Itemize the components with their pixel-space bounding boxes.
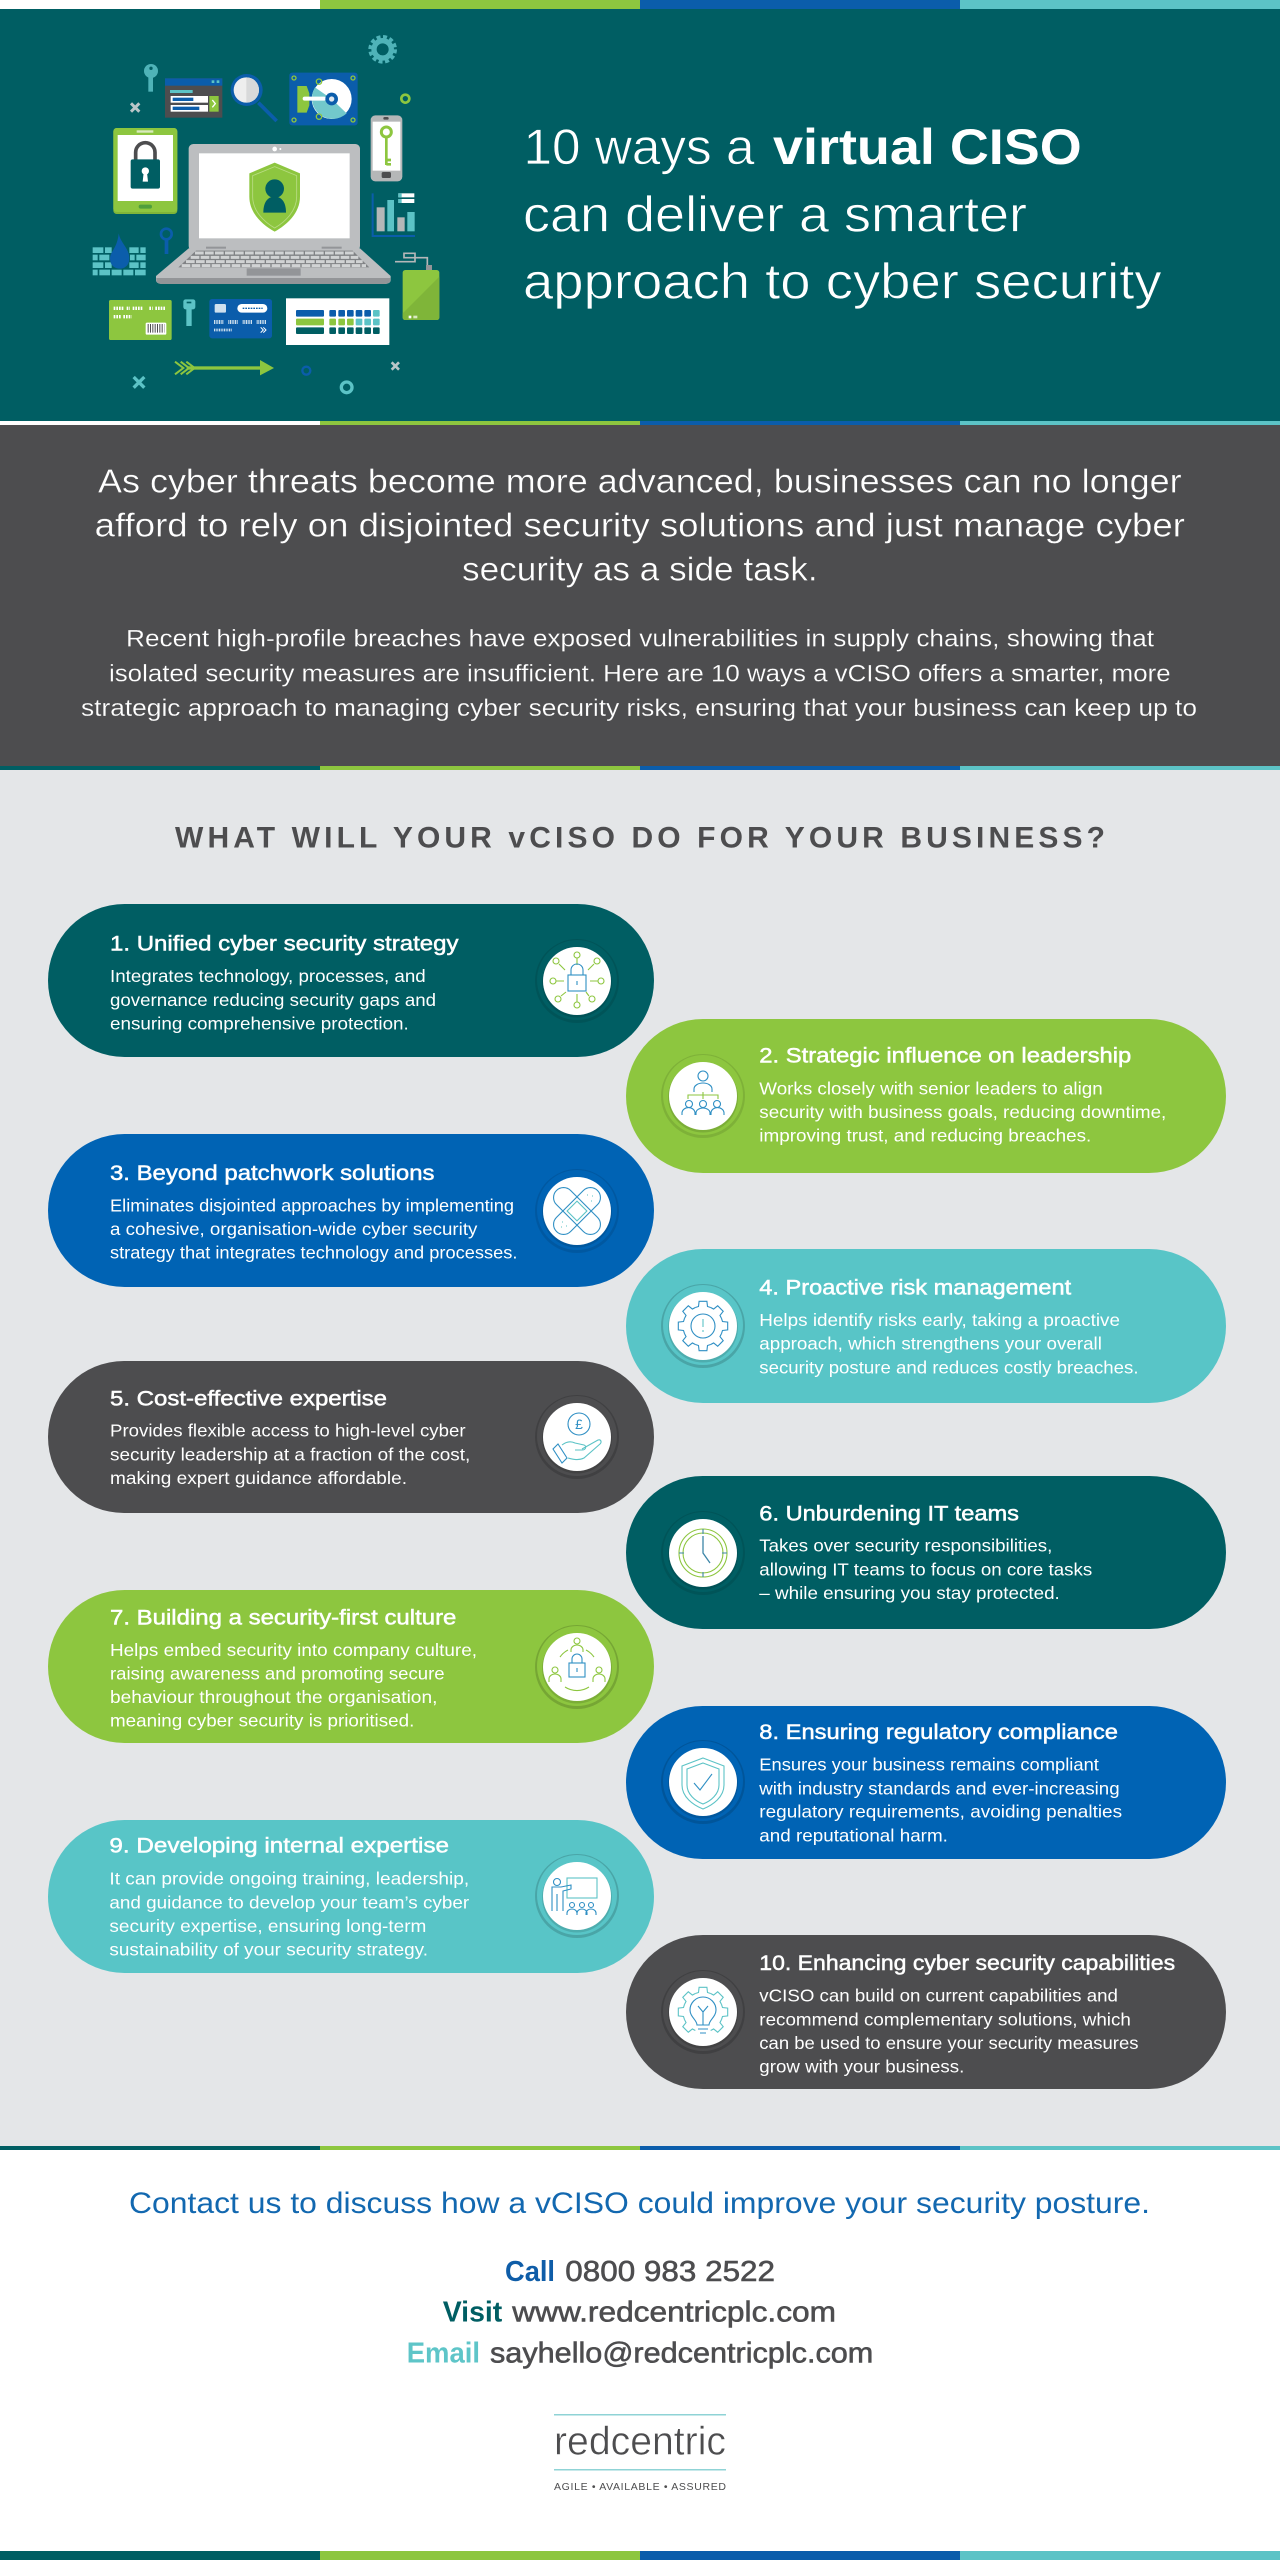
card title: 7. Building a security-first culture [110, 1605, 456, 1629]
card text: making expert guidance affordable. [110, 1468, 407, 1488]
pill [48, 1820, 654, 1973]
top colour strip [0, 0, 1280, 9]
contact: website: www.redcentricplc.com [511, 2297, 836, 2329]
logo: redcentric [554, 2414, 726, 2493]
icon: blue key [161, 229, 172, 254]
icon: leadership org chart [661, 1054, 745, 1138]
intro statement [95, 463, 1185, 588]
card text: and guidance to develop your team’s cyber [109, 1892, 469, 1912]
pill [48, 1590, 654, 1743]
card title: 1. Unified cyber security strategy [110, 932, 459, 956]
card text: recommend complementary solutions, which [759, 2009, 1131, 2029]
icon: lightbulb in gear [661, 1970, 745, 2054]
arrow [175, 360, 274, 375]
pill [626, 1706, 1226, 1859]
panel: grey benefits background [0, 770, 1280, 2146]
icon: external drive [395, 253, 439, 320]
icon: crossed plasters [535, 1169, 619, 1253]
icon: bank card [209, 299, 272, 338]
card 5 [48, 1361, 654, 1513]
bottom colour strip [0, 2551, 1280, 2560]
card 1 [48, 904, 654, 1057]
heading: WHAT WILL YOUR vCISO DO FOR YOUR BUSINESS? [175, 821, 1105, 854]
card text [758, 1755, 1122, 1845]
intro statement: afford to rely on disjointed security solutions and just manage cyber [95, 507, 1185, 544]
logo: redcentric: redcentric [554, 2419, 726, 2463]
card text: approach, which strengthens your overall [759, 1334, 1102, 1354]
card text: Eliminates disjointed approaches by implementing [110, 1195, 514, 1215]
card text: Helps embed security into company culture, [110, 1640, 477, 1660]
title [523, 119, 1162, 309]
card text [759, 1536, 1093, 1603]
card text [110, 1195, 517, 1263]
card text [110, 1640, 477, 1731]
card text: vCISO can build on current capabilities and [759, 1986, 1118, 2006]
title: approach to cyber security [523, 253, 1162, 309]
card text [759, 1078, 1166, 1146]
icon: hand with pound coin [535, 1395, 619, 1479]
icon: teal key [144, 64, 158, 92]
pill [626, 1019, 1226, 1173]
card text: allowing IT teams to focus on core tasks [759, 1559, 1093, 1579]
icon: login window [165, 78, 222, 118]
icon: firewall [93, 233, 146, 275]
icon: bar chart [373, 193, 415, 236]
card text: security posture and reduces costly breaches. [759, 1357, 1138, 1377]
card 6 [626, 1476, 1226, 1629]
card text: can be used to ensure your security measures [759, 2033, 1139, 2053]
card text [759, 1310, 1138, 1377]
icon: tablet with padlock [113, 128, 177, 214]
card text: behaviour throughout the organisation, [110, 1687, 437, 1707]
contact: email: sayhello@redcentricplc.com [490, 2337, 873, 2369]
icon: risk gear [661, 1284, 745, 1368]
pill [626, 1935, 1226, 2089]
card 8 [626, 1706, 1226, 1859]
contact: phone: 0800 983 2522 [565, 2256, 775, 2288]
pill [48, 904, 654, 1057]
pill [626, 1249, 1226, 1403]
card title: 6. Unburdening IT teams [759, 1501, 1019, 1525]
contact: website: Visit [443, 2297, 503, 2329]
card title: 5. Cost-effective expertise [110, 1387, 387, 1411]
card title: 10. Enhancing cyber security capabilities [759, 1951, 1175, 1975]
card text: – while ensuring you stay protected. [759, 1583, 1060, 1603]
card text: ensuring comprehensive protection. [110, 1014, 409, 1034]
pill [626, 1476, 1226, 1629]
card text: governance reducing security gaps and [110, 990, 436, 1010]
card title: 8. Ensuring regulatory compliance [759, 1720, 1118, 1744]
card 10 [626, 1935, 1226, 2089]
card text: security leadership at a fraction of the cost, [110, 1444, 470, 1464]
icon: magnifier [231, 74, 277, 121]
card text [759, 1986, 1139, 2076]
icon: shield with tick [661, 1740, 745, 1824]
card text: It can provide ongoing training, leadership, [109, 1869, 469, 1889]
contact: phone: Call [505, 2256, 555, 2288]
card 4 [626, 1249, 1226, 1403]
icon: x mark grey [131, 103, 139, 112]
icon: hard disk [289, 73, 358, 125]
pill [48, 1361, 654, 1513]
icon: green ID card [109, 300, 172, 340]
card text: regulatory requirements, avoiding penalties [759, 1802, 1122, 1822]
card 2 [626, 1019, 1226, 1173]
intro paragraph: Recent high-profile breaches have exposed vulnerabilities in supply chains, showing that [126, 626, 1154, 653]
intro statement: As cyber threats become more advanced, businesses can no longer [98, 463, 1182, 500]
intro paragraph: isolated security measures are insufficient. Here are 10 ways a vCISO offers a smarter, more [109, 661, 1171, 688]
card text: a cohesive, organisation-wide cyber security [110, 1219, 478, 1239]
card text: Helps identify risks early, taking a proactive [759, 1310, 1120, 1330]
card 7 [48, 1590, 654, 1743]
strip under introduction [0, 766, 1280, 770]
intro paragraph: strategic approach to managing cyber security risks, ensuring that your business can keep up to [81, 695, 1197, 722]
icon: networked padlock [535, 939, 619, 1023]
card text [110, 966, 436, 1034]
card text: improving trust, and reducing breaches. [759, 1126, 1091, 1146]
pill [48, 1134, 654, 1287]
card text: security expertise, ensuring long-term [109, 1916, 426, 1936]
icon: decorative marks [134, 362, 399, 393]
icon: key grid panel [286, 298, 389, 345]
card text: Takes over security responsibilities, [759, 1536, 1052, 1556]
panel: contact [129, 2187, 1150, 2493]
card title: 4. Proactive risk management [759, 1276, 1071, 1300]
strip under header [0, 421, 1280, 425]
panel: header [0, 9, 1280, 421]
card text: Provides flexible access to high-level cyber [110, 1421, 466, 1441]
card text: sustainability of your security strategy. [109, 1939, 428, 1959]
card text: Works closely with senior leaders to align [759, 1078, 1103, 1098]
card 9 [48, 1820, 654, 1973]
title: virtual CISO [773, 119, 1082, 175]
icon: clock [661, 1511, 745, 1595]
card text [109, 1869, 469, 1959]
card text: meaning cyber security is prioritised. [110, 1711, 414, 1731]
panel: introduction [0, 425, 1280, 766]
card title: 2. Strategic influence on leadership [759, 1044, 1131, 1068]
icon: phone with key [371, 115, 402, 181]
icon: green ring [401, 95, 409, 103]
card text: raising awareness and promoting secure [110, 1664, 445, 1684]
icon: gear [370, 37, 395, 62]
card text: and reputational harm. [759, 1825, 948, 1845]
icon: laptop with shield [156, 144, 391, 284]
logo: redcentric: AGILE • AVAILABLE • ASSURED [554, 2481, 726, 2493]
card title: 3. Beyond patchwork solutions [110, 1161, 434, 1185]
card text: grow with your business. [759, 2056, 964, 2076]
card title: 9. Developing internal expertise [109, 1834, 449, 1858]
title: 10 ways a [524, 119, 755, 175]
call to action: Contact us to discuss how a vCISO could improve your security posture. [129, 2187, 1150, 2220]
title: can deliver a smarter [523, 187, 1027, 243]
illustration: laptop and security devices [93, 37, 439, 393]
card text: security with business goals, reducing downtime, [759, 1102, 1166, 1122]
contact: email: Email [407, 2337, 480, 2369]
icon: team around padlock [535, 1625, 619, 1709]
card text: Ensures your business remains compliant [759, 1755, 1099, 1775]
intro statement: security as a side task. [462, 551, 818, 588]
icon: training presenter [535, 1854, 619, 1938]
icon: small key [183, 299, 195, 326]
card text: with industry standards and ever-increasing [758, 1778, 1120, 1798]
card text: Integrates technology, processes, and [110, 966, 426, 986]
card 3 [48, 1134, 654, 1287]
strip under benefits [0, 2146, 1280, 2150]
card text [110, 1421, 470, 1488]
intro paragraph [81, 626, 1197, 722]
card text: strategy that integrates technology and processes. [110, 1243, 517, 1263]
icon: hand with pound coin: £ [575, 1416, 583, 1432]
